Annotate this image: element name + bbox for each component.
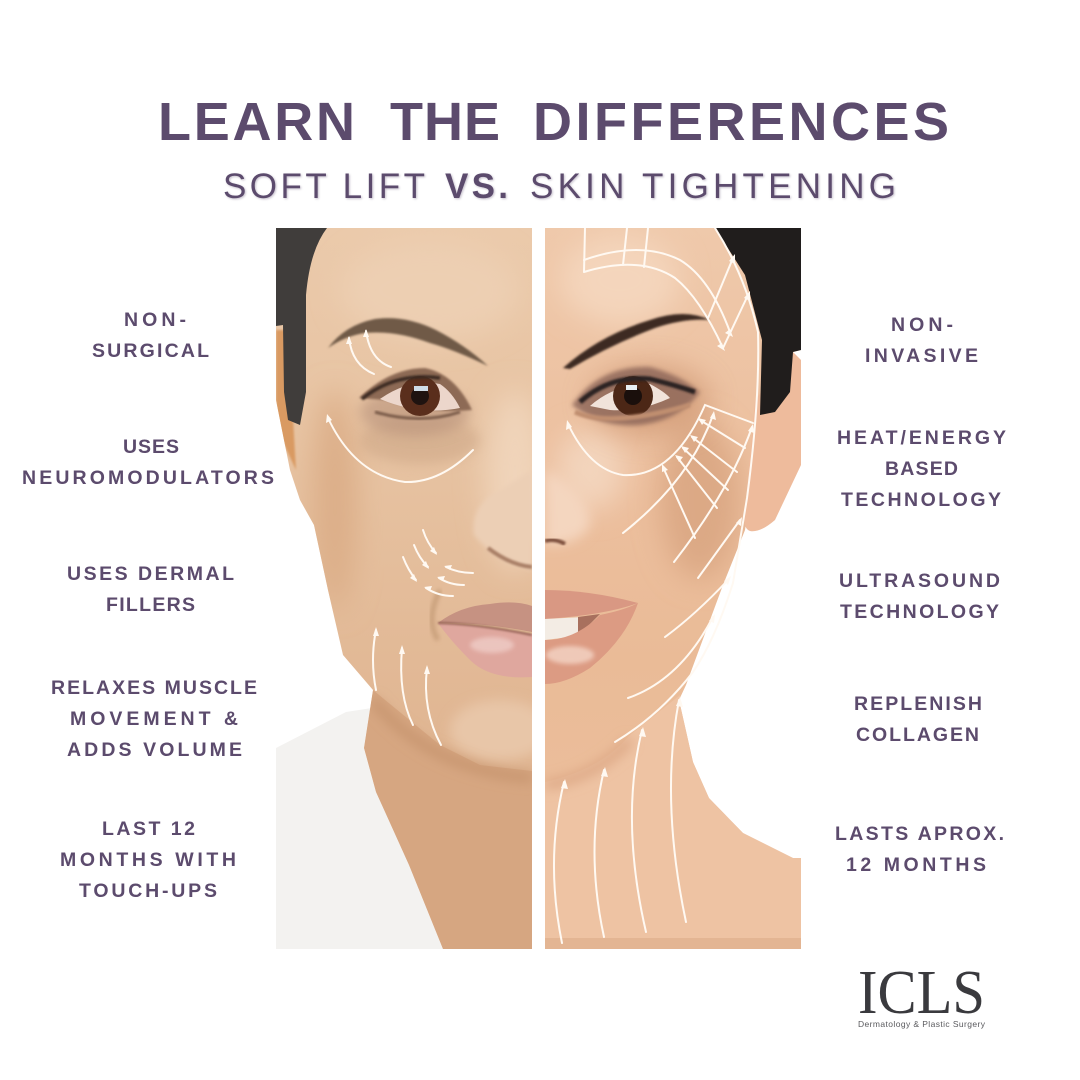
left label: uses dermal fillers	[67, 563, 234, 616]
logo: ICLS: Dermatology & Plastic Surgery	[858, 1019, 986, 1029]
panel: soft lift face photo	[276, 228, 550, 949]
right label: replenish collagen: COLLAGEN	[856, 724, 979, 746]
left hair	[276, 228, 327, 425]
left face arrows	[326, 329, 473, 745]
subtitle: SKIN TIGHTENING	[530, 167, 896, 206]
right label: lasts aprox 12 months: LASTS APROX.	[835, 823, 1004, 845]
right label: ultrasound technology	[839, 570, 1000, 623]
right eyebrow	[563, 314, 710, 369]
left face skin	[276, 228, 550, 949]
right label: replenish collagen	[854, 693, 982, 746]
right eye	[572, 367, 700, 425]
left label: relaxes muscle movement: MOVEMENT &	[70, 708, 238, 730]
left eyebrow	[328, 318, 488, 366]
left label: uses neuromodulators	[22, 436, 274, 489]
right label: lasts aprox 12 months: 12 MONTHS	[846, 854, 986, 876]
right label: replenish collagen: REPLENISH	[854, 693, 982, 715]
right label: non-invasive: INVASIVE	[865, 345, 978, 367]
left label: last 12 months	[60, 818, 236, 902]
left label: non-surgical: SURGICAL	[92, 340, 209, 362]
right label: heat/energy based technology: HEAT/ENERGY	[837, 427, 1006, 449]
left label: uses dermal fillers: FILLERS	[106, 594, 195, 616]
title: DIFFERENCES	[533, 92, 949, 152]
left label: last 12 months: LAST 12	[102, 818, 195, 840]
right label: ultrasound technology: TECHNOLOGY	[840, 601, 999, 623]
right label: non-invasive: NON-	[891, 314, 953, 336]
right label: heat/energy based technology: TECHNOLOGY	[841, 489, 1001, 511]
title	[158, 92, 949, 152]
left ear	[276, 330, 296, 470]
left label: relaxes muscle movement	[51, 677, 257, 761]
left nose	[430, 503, 532, 641]
subtitle	[223, 167, 896, 206]
right face contour arrows	[554, 228, 758, 943]
title: THE	[390, 92, 500, 152]
left label: non-surgical	[92, 309, 209, 362]
right hair	[715, 228, 801, 415]
subtitle: SOFT LIFT	[223, 167, 425, 206]
title: LEARN	[158, 92, 355, 152]
right face skin	[545, 228, 801, 950]
panel: skin tightening face photo	[545, 228, 801, 950]
right lips and teeth	[545, 590, 638, 684]
left label: last 12 months: TOUCH-UPS	[79, 880, 217, 902]
subtitle: VS.	[445, 167, 508, 206]
logo: ICLS: ICLS	[858, 959, 985, 1027]
right label: ultrasound technology: ULTRASOUND	[839, 570, 1000, 592]
left label: uses neuromodulators: NEUROMODULATORS	[22, 467, 274, 489]
right ear	[744, 352, 801, 531]
right label: lasts aprox 12 months	[835, 823, 1004, 876]
right label: heat/energy based technology: BASED	[885, 458, 958, 480]
right label: non-invasive	[865, 314, 978, 367]
left label: non-surgical: NON-	[124, 309, 186, 331]
left label: uses dermal fillers: USES DERMAL	[67, 563, 234, 585]
left eye	[359, 368, 472, 436]
robe	[276, 708, 443, 949]
left label: last 12 months: MONTHS WITH	[60, 849, 236, 871]
left label: relaxes muscle movement: RELAXES MUSCLE	[51, 677, 257, 699]
left lips	[438, 602, 532, 677]
left label: relaxes muscle movement: ADDS VOLUME	[67, 739, 242, 761]
right nose	[545, 470, 590, 545]
left label: uses neuromodulators: USES	[123, 436, 179, 458]
right label: heat/energy based technology	[837, 427, 1006, 511]
